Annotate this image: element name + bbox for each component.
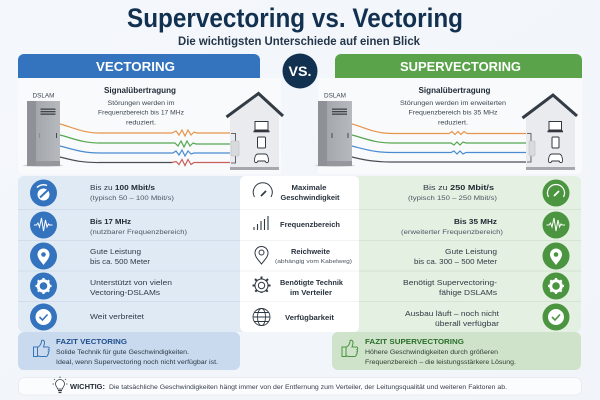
callout: important note: Die tatsächliche Geschwindigkeiten hängt immer von der Entfernung zum Verteiler, der Leitungsqualität und weiteren Faktoren ab. (109, 384, 507, 391)
text: fazit vectoring body (56, 349, 218, 366)
text: fazit supervectoring body: Höhere Geschwindigkeiten durch größeren (365, 349, 499, 356)
chart: wires with interference (60, 124, 232, 166)
panel: vectoring illustration (18, 54, 283, 174)
text: supervectoring rows (401, 183, 503, 328)
icon: pin outline (255, 246, 268, 264)
icon: signal bars (254, 216, 268, 230)
text: vectoring rows (90, 183, 187, 321)
text: fazit vectoring body: Ideal, wenn Supervectoring noch nicht verfügbar ist. (56, 359, 218, 366)
header: vectoring: VECTORING (96, 59, 175, 74)
text: supervectoring rows: Benötigt Supervectoring- (403, 278, 498, 287)
panel: supervectoring illustration (315, 54, 582, 174)
title: Supervectoring vs. Vectoring (127, 3, 463, 33)
heading: signal transmission: Signalübertragung (104, 86, 176, 95)
icon: gauge outline (253, 183, 272, 197)
icon: green waveform (542, 212, 570, 238)
text: criteria labels: Geschwindigkeit (280, 195, 340, 202)
text: signal description: reduziert. (438, 120, 468, 126)
text: supervectoring rows: fähige DSLAMs (439, 288, 497, 297)
badge: vs (282, 54, 318, 88)
icon: blue waveform (30, 212, 57, 238)
text: criteria labels: Benötigte Technik (280, 280, 343, 287)
text: criteria labels: im Verteiler (290, 290, 332, 297)
text: supervectoring rows: Ausbau läuft – noch nicht (405, 309, 499, 318)
icon: DSLAM cabinet: DSLAM (32, 94, 55, 100)
panel: supervectoring comparison rows (355, 176, 581, 332)
text: vectoring rows: Vectoring-DSLAMs (90, 288, 160, 297)
text: criteria labels (275, 185, 352, 322)
text: important note: WICHTIG: (70, 384, 105, 391)
icon: house with devices (522, 95, 577, 170)
callout: fazit supervectoring (332, 332, 581, 370)
text: signal description (98, 100, 184, 126)
callout: fazit vectoring (18, 332, 240, 370)
text: criteria labels: Maximale (292, 185, 327, 192)
icon: green speedometer (542, 180, 570, 206)
text: vectoring rows: Bis 17 MHz (90, 217, 131, 226)
panel: criteria column (240, 176, 359, 332)
text: vectoring rows: (nutzbarer Frequenzbereich) (90, 229, 187, 236)
text: vectoring rows: Gute Leistung (90, 247, 141, 256)
heading: signal transmission: Signalübertragung (418, 86, 491, 95)
icon: green gear (542, 272, 570, 300)
text: fazit vectoring body: Solide Technik für gute Geschwindigkeiten. (56, 349, 189, 356)
text: signal description: reduziert. (126, 120, 156, 126)
icon: thumbs up green (342, 340, 358, 356)
text: fazit supervectoring body: Frequenzbereich – die leistungsstärkere Lösung. (365, 359, 516, 366)
text: supervectoring rows: überall verfügbar (435, 319, 500, 328)
text: supervectoring rows: Bis zu 250 Mbit/s (423, 183, 494, 192)
text: vectoring rows: Weit verbreitet (90, 312, 144, 321)
text: vectoring rows: Bis zu 100 Mbit/s (90, 183, 155, 192)
text: signal description (400, 100, 507, 126)
icon: house with devices (226, 94, 283, 170)
text: supervectoring rows: (erweiterter Frequenzbereich) (401, 229, 503, 236)
heading: fazit supervectoring: FAZIT SUPERVECTORING (365, 337, 464, 346)
header: vectoring (18, 54, 260, 78)
icon: green location pin (542, 242, 570, 270)
text: criteria labels: Verfügbarkeit (285, 315, 335, 322)
icon: light bulb (52, 376, 68, 392)
icon: DSLAM cabinet (315, 94, 355, 167)
text: criteria labels: Reichweite (291, 249, 330, 256)
icon: globe (253, 308, 270, 326)
text: vectoring rows: Unterstützt von vielen (90, 278, 172, 287)
text: vectoring rows: bis ca. 500 Meter (90, 257, 151, 266)
badge: vs: VS. (288, 63, 312, 79)
icon: blue location pin (30, 242, 57, 270)
text: fazit supervectoring body (365, 349, 516, 366)
header: supervectoring (335, 54, 582, 78)
icon: thumbs up blue (34, 340, 49, 356)
text: supervectoring rows: Gute Leistung (445, 247, 497, 256)
text: signal description: Störungen werden im (108, 100, 174, 107)
icon: DSLAM cabinet: DSLAM (324, 94, 346, 100)
text: signal description: Frequenzbereich bis 35 MHz (408, 110, 498, 116)
chart: wires with reduced interference (352, 124, 530, 162)
heading: fazit vectoring: FAZIT VECTORING (56, 337, 127, 346)
callout: important note (18, 376, 582, 395)
text: signal description: Störungen werden im erweiterten (400, 100, 507, 107)
icon: gear outline (252, 276, 270, 293)
text: supervectoring rows: (typisch 150 – 250 Mbit/s) (408, 195, 497, 202)
header: supervectoring: SUPERVECTORING (400, 59, 521, 74)
text: supervectoring rows: bis ca. 300 – 500 Meter (414, 257, 498, 266)
text: vectoring rows: (typisch 50 – 100 Mbit/s) (90, 195, 174, 202)
icon: green check (542, 304, 570, 330)
text: criteria labels: (abhängig vom Kabelweg) (275, 259, 352, 265)
icon: blue gear (30, 272, 57, 300)
icon: blue speedometer (30, 180, 57, 206)
panel: vectoring comparison rows (18, 176, 245, 332)
subtitle: Die wichtigsten Unterschiede auf einen Blick (178, 34, 420, 48)
text: supervectoring rows: Bis 35 MHz (454, 217, 497, 226)
text: signal description: Frequenzbereich bis 17 MHz (98, 110, 184, 116)
icon: DSLAM cabinet (23, 94, 63, 167)
text: criteria labels: Frequenzbereich (280, 222, 340, 229)
icon: blue check (30, 304, 57, 330)
